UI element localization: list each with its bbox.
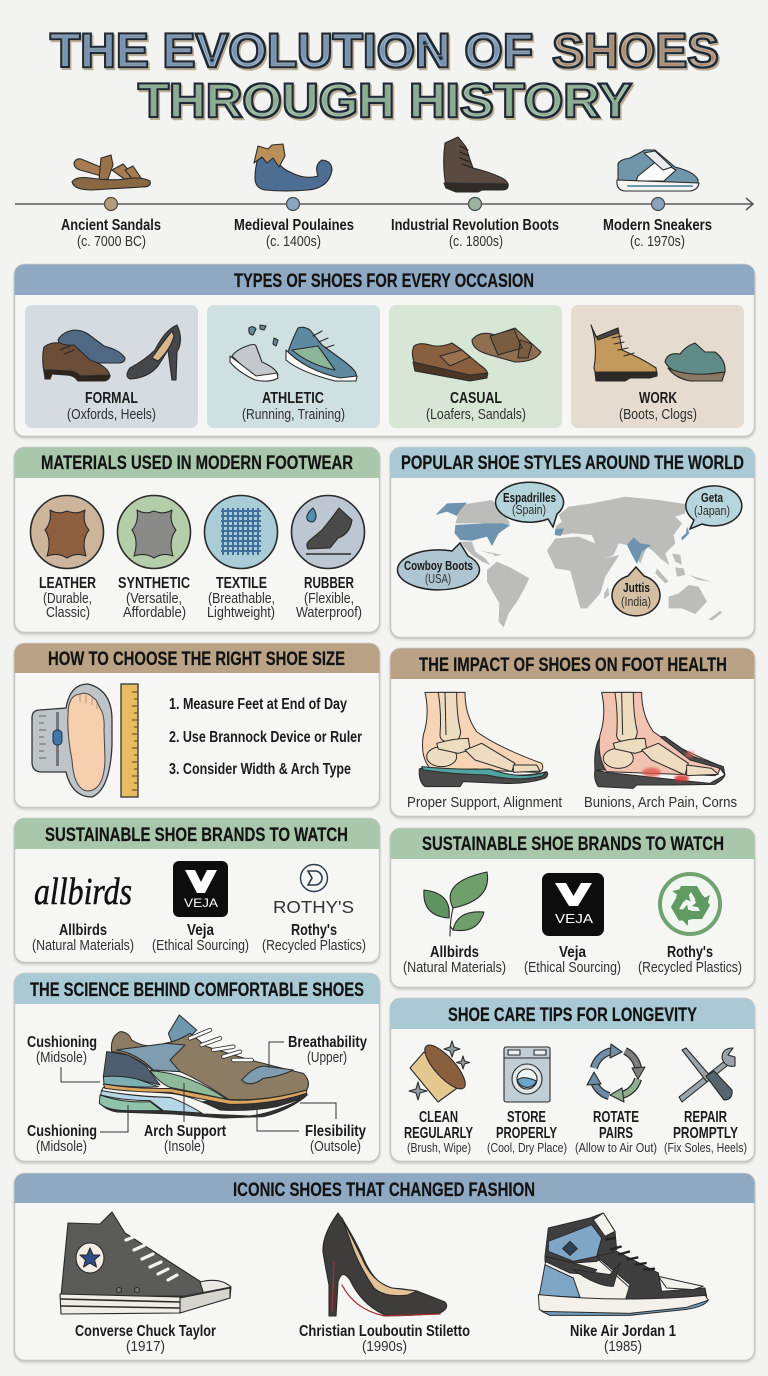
label: cushioning lower: (Midsole) — [36, 1139, 87, 1155]
shoe: converse chuck taylor — [60, 1212, 231, 1355]
timeline item: medieval poulaines: Medieval Poulaines — [234, 217, 354, 234]
callout: cowboy boots: Cowboy Boots — [404, 558, 473, 573]
card: work — [571, 305, 744, 428]
shoe: converse chuck taylor: Converse Chuck Taylor — [75, 1323, 216, 1340]
illustration: healthy foot: Proper Support, Alignment — [407, 795, 562, 811]
brand: allbirds: Allbirds — [59, 922, 107, 939]
card: formal — [25, 305, 198, 428]
timeline item: industrial boots — [391, 137, 559, 250]
shoe: nike air jordan 1: Nike Air Jordan 1 — [570, 1323, 676, 1340]
material: textile — [204, 496, 278, 621]
title: SHOES — [552, 25, 719, 78]
shoe: converse chuck taylor: (1917) — [126, 1339, 165, 1355]
brand: veja logo: (Ethical Sourcing) — [524, 960, 621, 976]
card: athletic: ATHLETIC — [262, 390, 324, 407]
icon: brannock device — [32, 684, 112, 797]
icon: ruler — [121, 684, 138, 797]
panel: types of shoes — [14, 264, 754, 436]
material: rubber: (Flexible, — [304, 591, 354, 607]
tip: clean regularly — [404, 1040, 473, 1155]
brand: allbirds leaf: (Natural Materials) — [403, 960, 506, 976]
timeline item: modern sneakers: (c. 1970s) — [630, 234, 685, 250]
brand: veja logo — [524, 873, 621, 976]
panel: iconic shoes — [14, 1174, 754, 1360]
panel: materials — [14, 448, 380, 632]
material: synthetic: SYNTHETIC — [118, 575, 190, 592]
header: sustainable brands left — [14, 818, 380, 849]
panel: sustainable brands left — [14, 818, 380, 962]
card: athletic: (Running, Training) — [242, 407, 345, 423]
header: types of shoes — [14, 264, 754, 295]
brand: rothys: ROTHY'S — [273, 897, 354, 917]
material: leather: Classic) — [46, 605, 90, 621]
tip: rotate pairs — [575, 1044, 657, 1155]
material: synthetic — [118, 496, 190, 621]
brand: rothys recycle icon: (Recycled Plastics) — [638, 960, 742, 976]
label: flexibility: Flesibility — [305, 1123, 366, 1140]
callout: geta — [686, 486, 742, 529]
brand: rothys recycle icon: Rothy's — [667, 944, 713, 961]
steps list: 2. Use Brannock Device or Ruler — [169, 729, 362, 746]
brand: rothys: (Recycled Plastics) — [262, 938, 366, 954]
label: cushioning lower — [27, 1123, 97, 1155]
tip: repair promptly: REPAIR — [684, 1109, 727, 1126]
header: shoe size: HOW TO CHOOSE THE RIGHT SHOE SIZE — [48, 648, 345, 670]
brand: veja logo: VEJA — [555, 912, 594, 926]
steps list — [169, 696, 362, 778]
tip: clean regularly: CLEAN — [419, 1109, 458, 1126]
tip: rotate pairs: (Allow to Air Out) — [575, 1140, 657, 1155]
panel: science of comfort — [14, 974, 380, 1162]
label: arch support: Arch Support — [144, 1123, 227, 1140]
callout: cowboy boots — [397, 543, 479, 590]
material: leather — [30, 496, 104, 621]
brand: rothys recycle icon — [638, 874, 742, 976]
timeline — [15, 137, 753, 250]
timeline item: ancient sandals — [61, 155, 161, 250]
header: science — [14, 974, 380, 1004]
material: textile: TEXTILE — [216, 575, 267, 592]
card: formal: (Oxfords, Heels) — [67, 407, 156, 423]
material: rubber: RUBBER — [304, 575, 354, 592]
tip: store properly — [487, 1047, 567, 1155]
tip: repair promptly: PROMPTLY — [673, 1125, 738, 1142]
brand: rothys — [262, 864, 366, 954]
timeline item: ancient sandals: (c. 7000 BC) — [77, 234, 146, 250]
callout: espadrilles: Espadrilles — [503, 490, 556, 505]
callout: cowboy boots: (USA) — [425, 571, 451, 586]
shoe: christian louboutin stiletto: Christian Louboutin Stiletto — [299, 1323, 470, 1340]
timeline item: ancient sandals: Ancient Sandals — [61, 217, 161, 234]
label: arch support — [144, 1123, 227, 1155]
panel: foot health — [390, 648, 754, 816]
card: athletic — [207, 305, 380, 428]
leader lines — [61, 1042, 336, 1132]
card: casual: CASUAL — [450, 390, 502, 407]
tip: store properly: (Cool, Dry Place) — [487, 1140, 567, 1155]
timeline item: industrial boots: (c. 1800s) — [449, 234, 503, 250]
callout: juttis: Juttis — [623, 580, 650, 595]
material: synthetic: Affordable) — [123, 605, 186, 621]
header: foot health — [390, 648, 754, 679]
timeline item: modern sneakers — [603, 150, 712, 250]
label: cushioning upper: Cushioning — [27, 1034, 97, 1051]
brand: allbirds — [32, 871, 134, 954]
label: breathability — [288, 1034, 367, 1066]
header: iconic shoes: ICONIC SHOES THAT CHANGED FASHION — [233, 1179, 535, 1201]
timeline item: industrial boots: Industrial Revolution Boots — [391, 217, 559, 234]
brand: allbirds: (Natural Materials) — [32, 938, 134, 954]
material: leather: LEATHER — [39, 575, 96, 592]
tip: repair promptly: (Fix Soles, Heels) — [664, 1140, 747, 1155]
shoe: nike air jordan 1: (1985) — [604, 1339, 642, 1355]
shoe: nike air jordan 1 — [538, 1213, 708, 1355]
brand: veja: (Ethical Sourcing) — [152, 938, 249, 954]
timeline item: medieval poulaines — [234, 144, 354, 250]
card: work: (Boots, Clogs) — [619, 407, 697, 423]
tip: clean regularly: REGULARLY — [404, 1125, 473, 1142]
label: arch support: (Insole) — [164, 1139, 205, 1155]
title — [50, 25, 719, 128]
brand: veja: VEJA — [184, 898, 218, 910]
material: rubber — [292, 496, 364, 621]
material: rubber: Waterproof) — [296, 605, 362, 621]
label: cushioning upper — [27, 1034, 97, 1066]
card: casual — [389, 305, 562, 428]
brand: allbirds leaf: Allbirds — [430, 944, 479, 961]
header: materials: MATERIALS USED IN MODERN FOOTWEAR — [41, 452, 353, 474]
header: sustainable brands right — [390, 828, 754, 859]
timeline item: modern sneakers: Modern Sneakers — [603, 217, 712, 234]
callout: juttis: (India) — [621, 594, 651, 609]
label: cushioning lower: Cushioning — [27, 1123, 97, 1140]
tip: rotate pairs: ROTATE — [593, 1109, 639, 1126]
world map — [435, 497, 722, 627]
callout: geta: Geta — [701, 490, 724, 505]
brand: veja logo: Veja — [559, 944, 586, 961]
tip: store properly: PROPERLY — [496, 1125, 557, 1142]
shoe: christian louboutin stiletto: (1990s) — [362, 1339, 407, 1355]
tip: rotate pairs: PAIRS — [599, 1125, 633, 1142]
label: flexibility: (Outsole) — [310, 1139, 361, 1155]
panel: popular styles world map — [390, 448, 754, 638]
timeline arrow — [15, 198, 753, 210]
header: shoe size — [14, 644, 380, 673]
shoe: christian louboutin stiletto — [299, 1213, 470, 1355]
brand: rothys: Rothy's — [291, 922, 337, 939]
panel: shoe size — [14, 644, 380, 808]
header: types of shoes: TYPES OF SHOES FOR EVERY OCCASION — [234, 270, 534, 292]
header: popular styles — [390, 448, 754, 478]
panel: shoe care — [390, 998, 754, 1162]
label: cushioning upper: (Midsole) — [36, 1050, 87, 1066]
header: iconic shoes — [14, 1174, 754, 1203]
tip: repair promptly — [664, 1048, 747, 1155]
illustration: unhealthy foot: Bunions, Arch Pain, Corns — [584, 795, 737, 811]
steps list: 3. Consider Width & Arch Type — [169, 761, 351, 778]
label: breathability: (Upper) — [307, 1050, 347, 1066]
label: breathability: Breathability — [288, 1034, 367, 1051]
title: THROUGH HISTORY — [138, 75, 632, 128]
card: casual: (Loafers, Sandals) — [426, 407, 526, 423]
material: textile: (Breathable, — [208, 591, 275, 607]
material: leather: (Durable, — [43, 591, 92, 607]
brand: allbirds: allbirds — [34, 871, 132, 913]
tip: store properly: STORE — [507, 1109, 546, 1126]
brand: allbirds leaf — [403, 872, 506, 976]
timeline item: medieval poulaines: (c. 1400s) — [266, 234, 321, 250]
steps list: 1. Measure Feet at End of Day — [169, 696, 347, 713]
callout: juttis — [612, 567, 660, 616]
shoe cross-section — [99, 1015, 309, 1118]
header: shoe care — [390, 998, 754, 1029]
tip: clean regularly: (Brush, Wipe) — [407, 1140, 471, 1155]
material: textile: Lightweight) — [207, 605, 275, 621]
callout: espadrilles — [496, 482, 564, 527]
panel: sustainable brands right — [390, 828, 754, 988]
illustration: unhealthy foot — [584, 692, 737, 811]
header: science: THE SCIENCE BEHIND COMFORTABLE SHOES — [30, 979, 364, 1001]
title: THE EVOLUTION OF — [50, 25, 533, 78]
material: synthetic: (Versatile, — [126, 591, 182, 607]
callout: espadrilles: (Spain) — [512, 502, 546, 517]
brand: veja: Veja — [187, 922, 214, 939]
illustration: healthy foot — [407, 692, 562, 811]
label: flexibility — [305, 1123, 366, 1155]
card: formal: FORMAL — [85, 390, 138, 407]
card: work: WORK — [639, 390, 677, 407]
callout: geta: (Japan) — [694, 503, 730, 518]
header: sustainable brands left: SUSTAINABLE SHOE BRANDS TO WATCH — [45, 824, 348, 846]
brand: veja — [152, 861, 249, 954]
header: materials — [14, 448, 380, 478]
header: shoe care: SHOE CARE TIPS FOR LONGEVITY — [448, 1004, 697, 1026]
